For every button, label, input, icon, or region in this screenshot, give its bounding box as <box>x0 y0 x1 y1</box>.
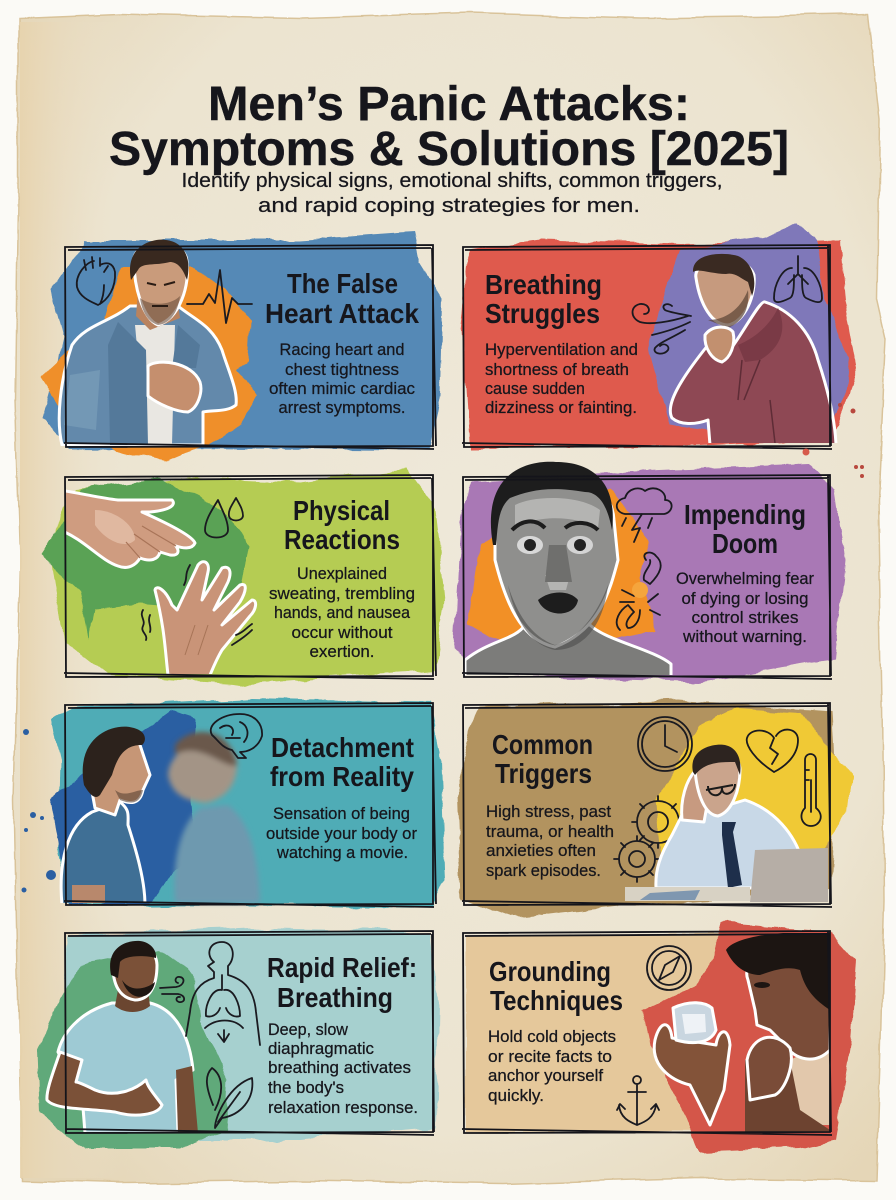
heading <box>270 732 414 792</box>
illustration: frightened man, black and white <box>465 462 671 677</box>
heading: Reactions <box>284 524 400 555</box>
heading <box>485 269 602 329</box>
heading: Rapid Relief: <box>267 952 417 983</box>
subtitle: and rapid coping strategies for men. <box>258 194 640 217</box>
body text: shortness of breath <box>485 360 629 379</box>
heading: Impending <box>684 499 806 530</box>
panel: rapid relief breathing <box>38 928 438 1148</box>
subtitle: Identify physical signs, emotional shifts, common triggers, <box>182 169 722 192</box>
icon: heartbeat line <box>187 270 252 323</box>
icon: broken heart <box>747 730 798 772</box>
panel: breathing struggles <box>462 222 864 469</box>
illustration: ghost double <box>168 732 260 903</box>
body text <box>488 1027 616 1105</box>
heading <box>284 495 400 555</box>
heading: Techniques <box>490 985 623 1016</box>
heading: from Reality <box>270 761 414 792</box>
body text: Hold cold objects <box>488 1027 616 1046</box>
illustration: sweating palm <box>60 490 195 567</box>
heading: Triggers <box>495 758 592 789</box>
body text: cause sudden <box>485 379 585 398</box>
illustration: man breathing with hand on belly <box>47 941 198 1133</box>
icon: broken chain <box>617 553 661 630</box>
icon: anatomical heart <box>77 257 115 305</box>
body text: diaphragmatic <box>268 1039 374 1058</box>
body text: hands, and nausea <box>274 603 411 622</box>
heading: Detachment <box>271 732 414 763</box>
body text: spark episodes. <box>486 861 601 880</box>
icon: lungs <box>774 256 822 302</box>
heading: Heart Attack <box>265 298 419 329</box>
icon: compass <box>647 946 691 990</box>
body text <box>486 802 614 880</box>
icon: breath puffs <box>160 977 184 1002</box>
icon: sweat drops <box>205 498 243 538</box>
body text: quickly. <box>488 1086 544 1105</box>
illustration: stressed man at laptop <box>625 745 828 902</box>
heading <box>492 729 593 789</box>
body text: Racing heart and <box>280 340 404 359</box>
title <box>109 78 789 176</box>
heading: Grounding <box>489 956 611 987</box>
body text: anxieties often <box>486 841 596 860</box>
body text: arrest symptoms. <box>278 398 406 417</box>
body text: relaxation response. <box>268 1098 418 1117</box>
panel: impending doom <box>455 462 864 682</box>
icon: clock <box>638 717 692 771</box>
body text: the body's <box>268 1078 344 1097</box>
heading: Common <box>492 729 593 760</box>
icon: storm cloud with lightning <box>617 488 672 542</box>
body text <box>269 564 415 661</box>
body text: control strikes <box>692 608 798 627</box>
body text: exertion. <box>310 642 374 661</box>
body text: occur without <box>292 623 393 642</box>
heading <box>684 499 806 559</box>
body text <box>269 340 415 417</box>
heading <box>265 268 419 329</box>
icon: leaves <box>207 1068 252 1128</box>
body text: outside your body or <box>266 824 417 843</box>
body text: Unexplained <box>297 564 387 583</box>
heading <box>267 952 417 1013</box>
body text <box>676 569 814 646</box>
body text: anchor yourself <box>488 1066 603 1085</box>
icon: wind swirls <box>632 304 691 354</box>
heading: Physical <box>293 495 390 526</box>
body text: dizziness or fainting. <box>485 398 637 417</box>
body text: High stress, past <box>486 802 611 821</box>
body text: watching a movie. <box>276 843 408 862</box>
illustration: trembling hand <box>155 562 256 680</box>
illustration: man in profile <box>61 727 150 905</box>
heading: The False <box>287 268 398 299</box>
panel: common triggers <box>458 700 852 918</box>
title: Symptoms & Solutions [2025] <box>109 123 789 176</box>
illustration: man clutching chest <box>59 240 236 445</box>
body text: without warning. <box>682 627 807 646</box>
body text: of dying or losing <box>682 589 808 608</box>
panel: physical reactions <box>42 468 445 684</box>
panel: grounding techniques <box>462 922 856 1152</box>
subtitle <box>182 169 722 217</box>
title: Men’s Panic Attacks: <box>208 78 690 131</box>
heading: Struggles <box>485 298 600 329</box>
icon: brain <box>211 714 262 758</box>
body text: trauma, or health <box>486 822 614 841</box>
body text: Hyperventilation and <box>485 340 638 359</box>
icon: tremble marks <box>142 565 252 645</box>
panel: the false heart attack <box>42 232 442 462</box>
icon: thermometer <box>801 754 821 826</box>
body text: Overwhelming fear <box>676 569 814 588</box>
body text: breathing activates <box>268 1058 411 1077</box>
heading: Breathing <box>277 982 393 1013</box>
icon: gears <box>614 796 679 882</box>
body text <box>485 340 638 417</box>
illustration: man holding ice <box>654 932 830 1132</box>
body text <box>266 804 417 862</box>
icon: body with lungs outline <box>186 942 260 1045</box>
body text: sweating, trembling <box>269 584 415 603</box>
body text: or recite facts to <box>488 1047 612 1066</box>
body text: Sensation of being <box>273 804 410 823</box>
body text: often mimic cardiac <box>269 379 415 398</box>
icon: anchor <box>617 1076 659 1125</box>
heading <box>489 956 623 1016</box>
panel: detachment from reality <box>22 698 445 908</box>
body text <box>268 1020 418 1117</box>
illustration: man in red hoodie <box>670 254 836 445</box>
body text: chest tightness <box>285 360 399 379</box>
body text: Deep, slow <box>268 1020 349 1039</box>
heading: Breathing <box>485 269 602 300</box>
heading: Doom <box>712 528 778 559</box>
